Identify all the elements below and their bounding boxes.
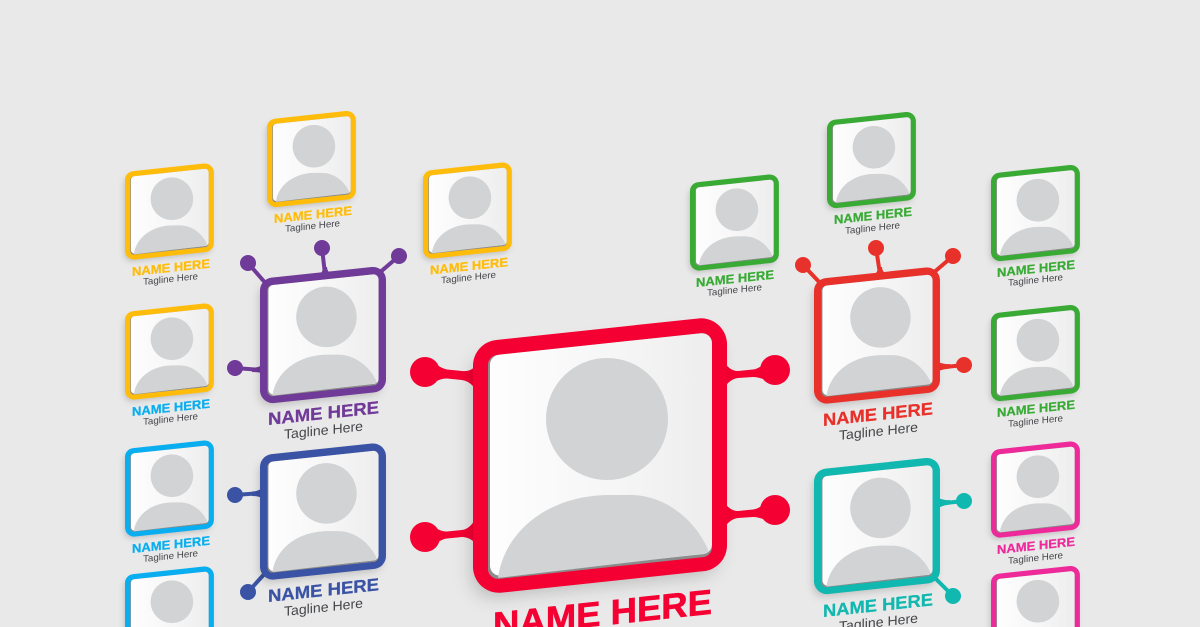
profile: teal with connectors (823, 470, 972, 627)
profile: green top right (997, 174, 1075, 289)
profile: indigo with connectors: Tagline Here (284, 596, 363, 619)
profile: yellow top left: Tagline Here (143, 271, 198, 288)
profile: yellow top centre: NAME HERE (274, 204, 352, 226)
profile: teal with connectors: NAME HERE (823, 589, 933, 621)
profile: yellow top right: NAME HERE (430, 255, 508, 277)
profile: green second right: Tagline Here (1008, 413, 1063, 430)
profile: green second right: NAME HERE (997, 398, 1075, 420)
profile: pink right: NAME HERE (997, 535, 1075, 557)
profile: pink right (997, 450, 1075, 567)
profile: purple with connectors: Tagline Here (284, 419, 363, 442)
profile: purple with connectors (227, 240, 407, 442)
profile: green top right: NAME HERE (997, 258, 1075, 280)
profile: cyan left: NAME HERE (132, 534, 210, 556)
connectors (410, 355, 790, 552)
profile: green left of column: Tagline Here (707, 282, 762, 299)
profile: red with connectors (795, 240, 972, 443)
profile: yellow second left (132, 312, 210, 428)
profile: cyan left: Tagline Here (143, 548, 198, 565)
profile: main red centre (410, 343, 790, 627)
profile: pink right: Tagline Here (1008, 550, 1063, 567)
profile: yellow top centre (274, 120, 352, 235)
profile: green second right (997, 314, 1075, 430)
profile: indigo with connectors: NAME HERE (268, 574, 379, 606)
profile: yellow top right (430, 171, 508, 286)
profile: cyan left (132, 449, 210, 565)
profile: yellow top centre: Tagline Here (285, 218, 340, 235)
profile: yellow top right: Tagline Here (441, 270, 496, 286)
profile: pink bottom right (998, 575, 1073, 627)
profile: yellow second left: NAME HERE (132, 397, 210, 419)
profile: green left of column (696, 183, 774, 299)
profile: cyan bottom left (132, 575, 207, 627)
profile: yellow top left (132, 172, 210, 288)
profile: red with connectors: Tagline Here (839, 420, 918, 443)
profile: yellow second left: Tagline Here (143, 411, 198, 428)
profile: purple with connectors: NAME HERE (268, 397, 379, 429)
profile: yellow top left: NAME HERE (132, 257, 210, 279)
profile: green top centre: Tagline Here (845, 220, 900, 237)
profile: green left of column: NAME HERE (696, 268, 774, 290)
profile: green top right: Tagline Here (1008, 272, 1063, 289)
profile: red with connectors: NAME HERE (823, 398, 933, 430)
profile: green top centre (834, 121, 912, 237)
profile: green top centre: NAME HERE (834, 205, 912, 227)
profile: indigo with connectors (227, 456, 379, 619)
